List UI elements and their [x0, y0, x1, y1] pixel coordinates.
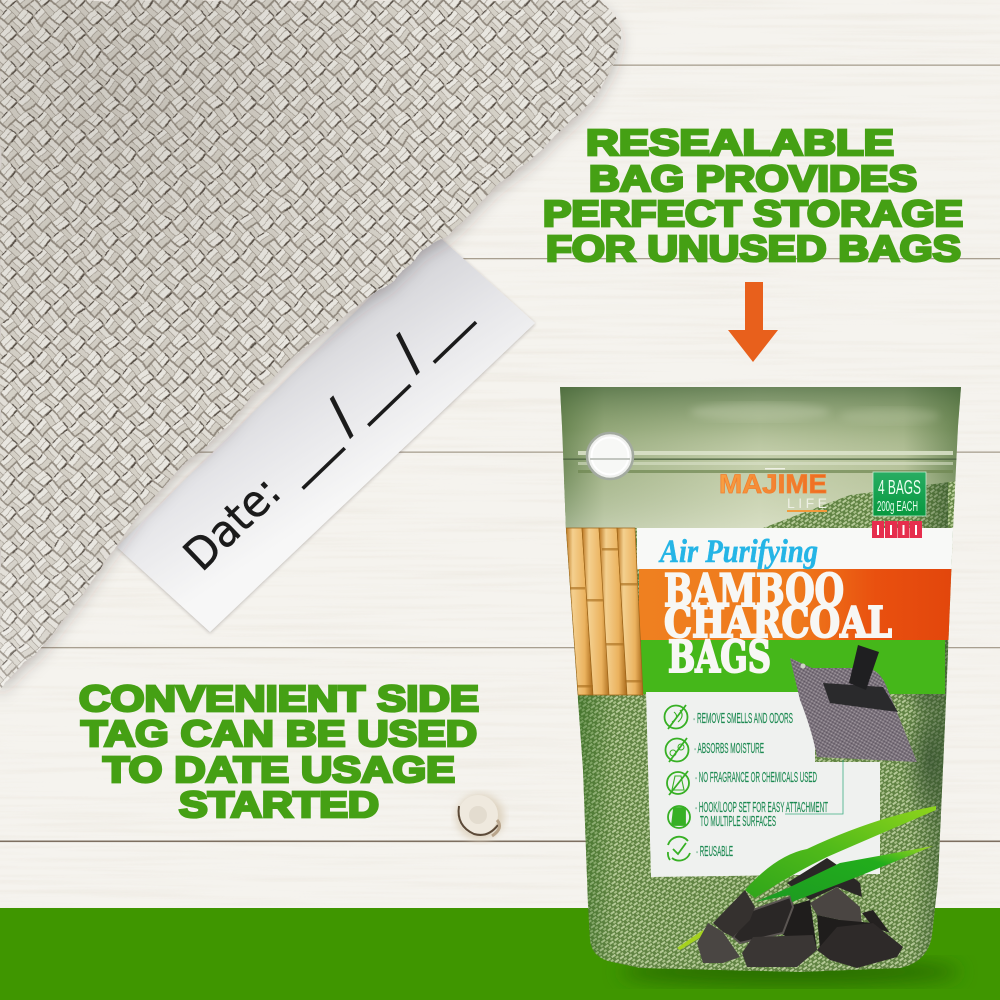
zip seal [560, 451, 961, 473]
white feature panel [646, 692, 880, 877]
product title [658, 534, 892, 683]
green stripe [641, 640, 945, 694]
heading: side tag [79, 678, 479, 825]
product bag: · HOOK/LOOP SET FOR EASY ATTACHMENT [695, 800, 828, 816]
brand logo: LIFE [787, 495, 827, 511]
feature list: TO MULTIPLE SURFACES [700, 814, 776, 830]
seal hole [587, 433, 633, 479]
heading: side tag: STARTED [179, 784, 379, 825]
badge: 4 bags [872, 472, 926, 538]
small charcoal pouch [790, 645, 917, 762]
heading: resealable bag: BAG PROVIDES [589, 158, 917, 199]
brand logo [719, 468, 827, 512]
tag text: date [170, 282, 480, 583]
heading: side tag: TAG CAN BE USED [81, 713, 477, 754]
green bottom band [0, 908, 1000, 1000]
product title: CHARCOAL [664, 598, 892, 647]
bamboo stalks [566, 528, 643, 695]
product bag: · NO FRAGRANCE OR CHEMICALS USED [695, 770, 817, 786]
side date tag [117, 233, 535, 632]
connector line [785, 760, 843, 814]
knit fabric base [555, 480, 965, 980]
heading: resealable bag: FOR UNUSED BAGS [546, 228, 961, 269]
feature list: · ABSORBS MOISTURE [694, 741, 764, 757]
foil top [555, 387, 965, 528]
feature list: · REMOVE SMELLS AND ODORS [693, 711, 793, 727]
green leaves [745, 806, 936, 902]
heading: resealable bag: RESEALABLE [586, 122, 894, 163]
heading: side tag: CONVENIENT SIDE [79, 678, 479, 719]
badge: 4 bags: 200g EACH [877, 498, 918, 515]
feature list: · REUSABLE [696, 844, 733, 860]
badge: 4 bags: 4 BAGS [878, 477, 921, 499]
burlap fabric pouch [0, 0, 621, 690]
tag text: date: Date: [174, 466, 291, 581]
arrow pointing down to bag [728, 282, 778, 362]
wood knot [456, 794, 504, 840]
heading: resealable bag [543, 122, 963, 269]
product title: Air Purifying [658, 534, 818, 570]
orange stripe [639, 569, 955, 640]
tag text: date: / [381, 325, 435, 381]
charcoal pieces [677, 858, 903, 968]
heading: resealable bag: PERFECT STORAGE [543, 193, 963, 234]
tag text: date: _ [334, 349, 412, 428]
product bag [555, 387, 965, 980]
tag text: date: _ [268, 412, 347, 491]
brand logo: MAJIME [719, 469, 827, 499]
tag text: date: _ [400, 286, 478, 365]
white stripe [637, 528, 957, 569]
heading: side tag: TO DATE USAGE [103, 749, 455, 790]
feature list [664, 705, 828, 861]
product title: BAMBOO [664, 564, 844, 617]
tag text: date: / [314, 389, 369, 445]
product title: BAGS [668, 632, 771, 683]
